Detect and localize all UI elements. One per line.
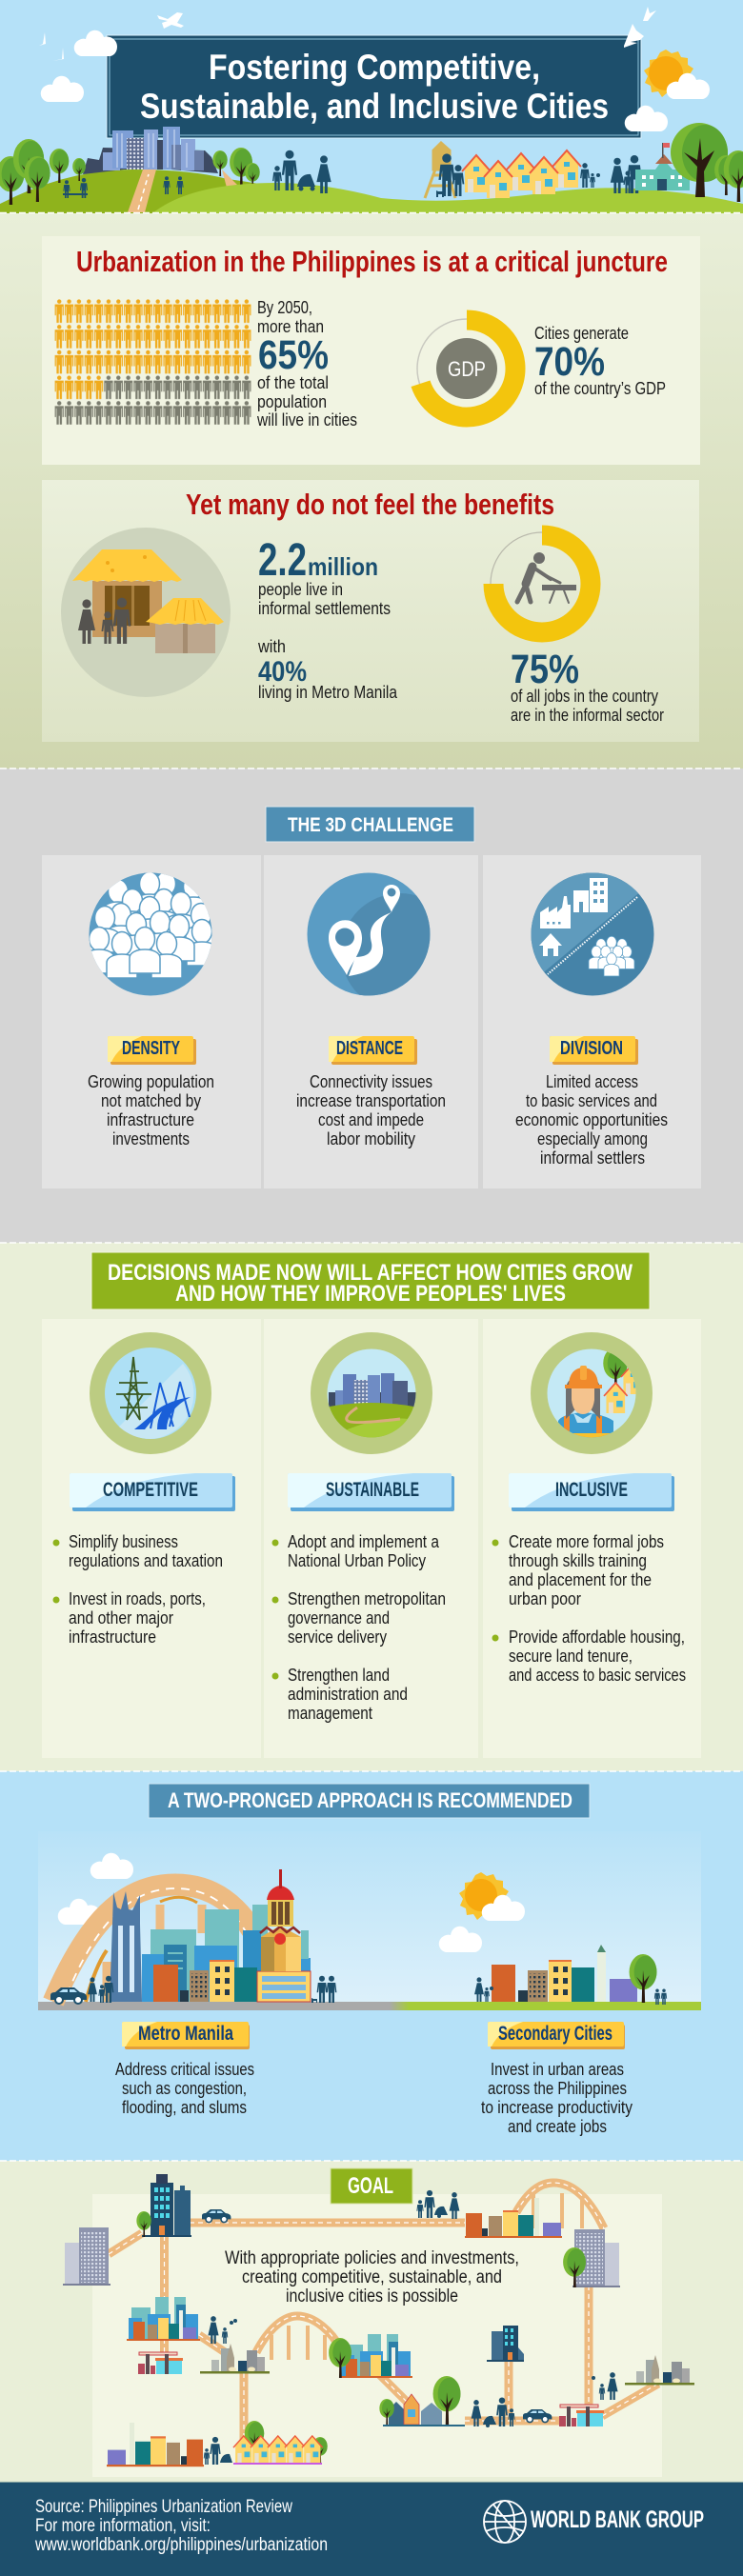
text: division [515,1072,668,1168]
logo: world bank group [484,2501,704,2543]
text: distance: cost and impede [318,1110,424,1129]
label: competitive: COMPETITIVE [103,1479,198,1501]
icon: city top right [465,2198,562,2238]
text block: 65%: of the total [257,373,329,392]
panel: sustainable [264,1319,478,1758]
icon: gray towers left [63,2227,110,2286]
text: division: especially among [537,1129,648,1148]
icon: car bottom road [523,2409,552,2423]
icon: gas station left [138,2352,183,2374]
text block: 65%: will live in cities [256,410,357,429]
chart: GDP donut 70%: GDP [448,357,486,381]
bullets: sustainable: Adopt and implement a [288,1532,440,1551]
label: division: DIVISION [560,1038,623,1059]
heading: goal [331,2168,412,2204]
text: goal statement: creating competitive, sustainable, and [242,2267,502,2287]
label: sustainable: SUSTAINABLE [326,1479,419,1501]
title text: Sustainable, and Inclusive Cities [140,87,609,126]
bullets: sustainable: governance and [288,1608,390,1627]
text: distance: Connectivity issues [310,1072,432,1091]
icon: route pins [307,872,431,996]
text block: 2.2 million: million [308,552,378,581]
icon: divided city [532,872,653,996]
text block: 75%: of all jobs in the country [511,687,658,706]
text block: 65%: By 2050, [257,298,312,317]
icon: car and people metro [50,1976,336,2004]
text: secondary cities: Invest in urban areas [491,2060,624,2079]
bullets: sustainable: administration and [288,1685,408,1704]
text block: 70%: 70% [534,339,605,385]
icon: row of houses [462,150,581,198]
label: division [550,1036,638,1065]
bullets: inclusive: Create more formal jobs [509,1532,664,1551]
text block: 2.2 million: living in Metro Manila [258,683,398,702]
label: distance [329,1036,417,1065]
icon: car top road [202,2209,231,2223]
icon: carpenter [517,552,576,603]
icon: plane and birds [39,7,656,61]
text block: 70%: Cities generate [534,324,629,343]
icon: dark towers top left [136,2174,191,2237]
text: secondary cities: to increase productivity [481,2098,633,2117]
icon: family bottom left [204,2437,232,2465]
icon: gray skyline mid [200,2344,270,2373]
chart: GDP donut 70% [417,319,516,418]
bullets: competitive: Simplify business [69,1532,178,1551]
icon: family right road [592,2372,618,2400]
header illustration: hills, city, people [0,123,743,213]
bullets: sustainable [272,1532,446,1723]
icon: city skyline [83,127,218,174]
bullets: sustainable: Strengthen land [288,1666,390,1685]
bullets: inclusive: urban poor [509,1589,581,1608]
icon: family with stroller [272,150,331,193]
icon: houses center [379,2376,465,2426]
label: inclusive: INCLUSIVE [555,1479,628,1501]
icon: secondary city [474,1945,667,2005]
icon: yellow houses bottom [233,2421,328,2465]
text: source [34,2497,328,2555]
heading: benefits: Yet many do not feel the benefits [186,488,554,521]
text block: 65%: more than [257,317,324,336]
icon: family bottom road [472,2397,515,2427]
icon: sun [644,50,693,97]
chart: people pictogram 65% [54,299,251,427]
text: density: investments [112,1129,190,1148]
section background: two-pronged approach [0,1771,743,2161]
text: division: to basic services and [526,1091,657,1110]
text block: 2.2 million: 40% [258,656,307,688]
text: goal statement: With appropriate policies and investments, [225,2248,519,2268]
icon: memorial tower [110,1891,146,2002]
chart: informal jobs donut 75% [491,532,593,635]
heading banner: decisions: AND HOW THEY IMPROVE PEOPLES' LIVES [175,1281,566,1307]
text: density [88,1072,214,1148]
bullets: inclusive: through skills training [509,1551,647,1570]
icon: city mid left [127,2297,200,2341]
label: secondary cities: Secondary Cities [498,2023,612,2045]
section background: decisions [0,1243,743,1771]
text block: 2.2 million: with [257,637,286,656]
heading: goal: GOAL [348,2173,393,2199]
bullets: competitive: infrastructure [69,1627,156,1647]
panel: benefits [42,480,699,742]
heading banner: the 3D challenge: THE 3D CHALLENGE [288,814,453,836]
text: distance: increase transportation [296,1091,446,1110]
label: secondary cities [488,2022,625,2049]
panel: division [483,855,701,1188]
icon: cloud over sun [482,1895,525,1921]
text block: 65%: 65% [258,332,329,378]
icon: family top road [416,2190,459,2219]
illustration: metro and secondary cities [38,1831,701,2010]
icon: arch bridge [53,1885,255,2002]
label: distance: DISTANCE [336,1038,403,1059]
heading banner: two-pronged approach [149,1784,590,1818]
label: density [108,1036,196,1065]
bullets: competitive [53,1532,223,1647]
text block: 2.2 million: 2.2 [258,535,307,586]
label: inclusive [509,1473,674,1511]
icon: worker with houses [531,1332,653,1454]
icon: people on seesaw [63,176,184,198]
icon: gray towers right [563,2229,620,2287]
icon: pylon and bridge [90,1332,211,1454]
icon: cloud over sun [667,73,710,99]
text: density: not matched by [101,1091,201,1110]
text: source: For more information, visit: [35,2516,211,2536]
icon: people with balloons [580,155,642,193]
text: distance: labor mobility [327,1129,415,1148]
panel: density [42,855,261,1188]
heading banner: two-pronged approach: A TWO-PRONGED APPROACH IS RECOMMENDED [168,1788,572,1812]
text: source: www.worldbank.org/philippines/urbanization [34,2535,328,2555]
icon: sun [459,1872,509,1920]
text block: 75%: are in the informal sector [511,706,664,725]
text block: 2.2 million [257,535,398,702]
icon: green city [311,1332,432,1454]
bullets: competitive: and other major [69,1608,173,1627]
text block: 65%: population [257,392,327,411]
icon: clock tower church [257,1869,311,2002]
bullets: inclusive [492,1532,686,1685]
text block: 70% [534,324,666,398]
text: goal statement [225,2248,519,2306]
roads [109,2183,658,2441]
section background: header sky [0,0,743,213]
icon: clouds [58,1853,482,1952]
bullets: competitive: Invest in roads, ports, [69,1589,206,1608]
bullets: sustainable: service delivery [288,1627,387,1647]
text block: 70%: of the country’s GDP [534,379,666,398]
bullets: inclusive: and placement for the [509,1570,652,1589]
text: secondary cities [481,2060,633,2136]
icon: school building [635,143,690,190]
bullets: inclusive: Provide affordable housing, [509,1627,685,1647]
text: metro manila: flooding, and slums [122,2098,247,2117]
bullets: inclusive: secure land tenure, [509,1647,633,1666]
bullets: competitive: regulations and taxation [69,1551,223,1570]
text: source: Source: Philippines Urbanization Review [35,2497,292,2517]
bullets: sustainable: National Urban Policy [288,1551,426,1570]
section background: urbanization [0,213,743,769]
title text: Fostering Competitive, [209,48,540,87]
section background: goal [0,2161,743,2483]
icon: city center [329,2334,412,2378]
footer bar [0,2481,743,2576]
text: secondary cities: and create jobs [508,2117,607,2136]
panel: urbanization [42,236,700,465]
section background: 3D challenge [0,769,743,1243]
text block: 75% [511,647,664,725]
bullets: inclusive: and access to basic services [509,1666,686,1685]
text: metro manila: Address critical issues [115,2060,254,2079]
icon: metro buildings [142,1905,311,2002]
panel: inclusive [483,1319,701,1758]
icon: trees left [0,139,260,205]
icon: water tower [425,143,455,198]
icon: header clouds [41,30,668,131]
icon: gray skyline right [625,2355,694,2385]
text block: 75%: 75% [511,647,579,692]
text block: 2.2 million: informal settlements [258,599,391,618]
bullets: sustainable: Strengthen metropolitan [288,1589,446,1608]
icon: small dark tower [487,2326,524,2362]
icon: family with dog [436,153,464,197]
text: division: Limited access [546,1072,638,1091]
text: distance [296,1072,446,1148]
label: competitive [70,1473,235,1511]
icon: dense crowd [84,872,217,996]
label: sustainable [288,1473,454,1511]
heading banner: decisions [91,1252,650,1309]
icon: big trees right [671,123,743,202]
panel: goal map [63,2168,694,2477]
panel: competitive [42,1319,261,1758]
icon: gas station right [559,2405,604,2426]
title text [140,48,609,126]
icon: city bottom left [107,2423,204,2466]
text: secondary cities: across the Philippines [488,2079,627,2098]
decorative dashes [0,213,743,2161]
icon: informal settlement [61,528,231,697]
icon: family with balloons [208,2316,237,2344]
title banner [107,35,641,138]
heading banner: the 3D challenge [266,807,474,842]
text: division: economic opportunities [515,1110,668,1129]
text: density: Growing population [88,1072,214,1091]
label: metro manila [122,2022,250,2049]
panel: distance [264,855,478,1188]
bullets: sustainable: management [288,1704,372,1723]
label: density: DENSITY [122,1038,180,1059]
text: metro manila: such as congestion, [122,2079,247,2098]
label: metro manila: Metro Manila [138,2023,233,2045]
text block: 2.2 million: people live in [258,580,343,599]
text: goal statement: inclusive cities is possible [286,2286,458,2306]
text: division: informal settlers [540,1148,645,1168]
heading banner: decisions: DECISIONS MADE NOW WILL AFFECT HOW CITIES GROW [108,1260,633,1286]
text block: 65% [256,298,357,429]
text: metro manila [115,2060,254,2117]
text: density: infrastructure [107,1110,194,1129]
